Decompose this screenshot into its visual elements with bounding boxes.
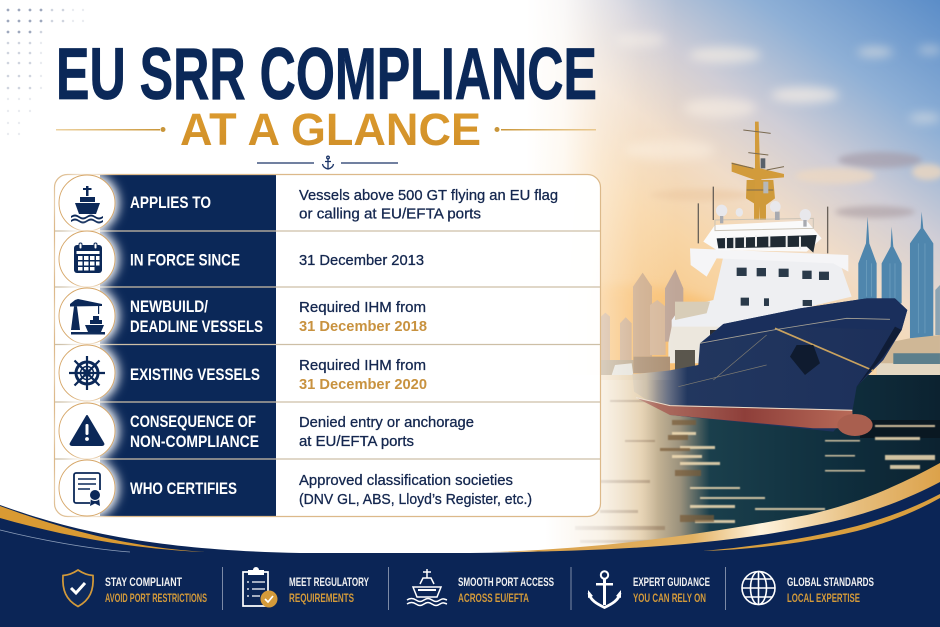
title: EU SRR Compliance: EU SRR COMPLIANCE bbox=[56, 34, 597, 115]
benefit: meet regulatory requirements bbox=[243, 567, 369, 608]
benefit: expert guidance bbox=[588, 571, 710, 608]
benefit: global standards: LOCAL EXPERTISE bbox=[787, 593, 860, 605]
row: existing vessels: Required IHM from bbox=[299, 357, 426, 374]
row: newbuild vessels: NEWBUILD/ bbox=[130, 298, 208, 316]
benefit: expert guidance: EXPERT GUIDANCE bbox=[633, 577, 710, 589]
row: consequence of non-compliance: at EU/EFTA ports bbox=[299, 433, 414, 450]
row: who certifies: WHO CERTIFIES bbox=[130, 480, 237, 498]
row: in force since bbox=[57, 228, 424, 290]
row: in force since: 31 December 2013 bbox=[299, 252, 424, 269]
subtitle: at a glance with gold rules bbox=[56, 104, 596, 155]
icon: anchor bbox=[588, 571, 621, 608]
row: consequence of non-compliance: CONSEQUENCE OF bbox=[130, 413, 256, 431]
icon: ship bbox=[71, 186, 103, 224]
icon: shield check bbox=[63, 570, 93, 606]
benefit: global standards: GLOBAL STANDARDS bbox=[787, 577, 874, 589]
hull bbox=[632, 298, 907, 436]
decorative dot grid bbox=[7, 9, 84, 135]
ship bbox=[632, 122, 907, 436]
benefit: smooth port access bbox=[407, 569, 554, 606]
row: consequence of non-compliance bbox=[57, 400, 474, 462]
row: newbuild vessels: DEADLINE VESSELS bbox=[130, 318, 263, 336]
benefit: stay compliant: STAY COMPLIANT bbox=[105, 577, 182, 589]
benefit: smooth port access: SMOOTH PORT ACCESS bbox=[458, 577, 554, 589]
benefit: meet regulatory requirements: REQUIREMENTS bbox=[289, 593, 354, 605]
benefit: expert guidance: YOU CAN RELY ON bbox=[633, 593, 706, 605]
icon: white ship on waves bbox=[407, 569, 447, 606]
row: newbuild vessels: Required IHM from bbox=[299, 299, 426, 316]
row: who certifies: (DNV GL, ABS, Lloyd’s Register, etc.) bbox=[299, 491, 532, 508]
benefit: meet regulatory requirements: MEET REGULATORY bbox=[289, 577, 369, 589]
row: existing vessels bbox=[57, 342, 427, 404]
icon: globe bbox=[742, 572, 775, 604]
subtitle: at a glance with gold rules: AT A GLANCE bbox=[180, 104, 481, 155]
background photo: ship in port at sunset bbox=[450, 0, 940, 418]
footer benefits strip bbox=[63, 567, 874, 610]
row: who certifies: Approved classification societies bbox=[299, 472, 513, 489]
row: consequence of non-compliance: NON-COMPLIANCE bbox=[130, 433, 259, 451]
row: newbuild vessels bbox=[57, 285, 427, 347]
benefit: stay compliant: AVOID PORT RESTRICTIONS bbox=[105, 593, 207, 605]
icon: clipboard with gold check bbox=[243, 567, 278, 608]
benefit: global standards bbox=[742, 572, 874, 605]
row: applies to: APPLIES TO bbox=[130, 194, 211, 212]
row: who certifies bbox=[57, 457, 532, 519]
row: newbuild vessels: 31 December 2018 bbox=[299, 318, 427, 335]
benefit: smooth port access: ACROSS EU/EFTA bbox=[458, 593, 529, 605]
navy label column bbox=[54, 174, 601, 516]
row: in force since: IN FORCE SINCE bbox=[130, 252, 240, 270]
row: existing vessels: EXISTING VESSELS bbox=[130, 366, 260, 384]
panel: facts table bbox=[54, 172, 601, 519]
icon: shipyard crane and vessel bbox=[70, 299, 105, 334]
icon: certificate with rosette bbox=[74, 473, 100, 506]
superstructure bbox=[633, 187, 852, 373]
row: existing vessels: 31 December 2020 bbox=[299, 376, 427, 393]
water bbox=[450, 375, 940, 555]
icon: calendar bbox=[74, 243, 102, 273]
mast bbox=[732, 122, 784, 220]
icon: warning triangle bbox=[71, 416, 103, 445]
benefit: stay compliant bbox=[63, 570, 207, 606]
footer band with gold swooshes bbox=[0, 463, 940, 627]
row: applies to: or calling at EU/EFTA ports bbox=[299, 206, 481, 222]
anchor divider bbox=[257, 156, 398, 169]
row: consequence of non-compliance: Denied entry or anchorage bbox=[299, 414, 474, 431]
icon: ship wheel bbox=[69, 356, 105, 390]
row: applies to bbox=[57, 172, 558, 234]
row: applies to: Vessels above 500 GT flying an EU flag bbox=[299, 187, 558, 204]
